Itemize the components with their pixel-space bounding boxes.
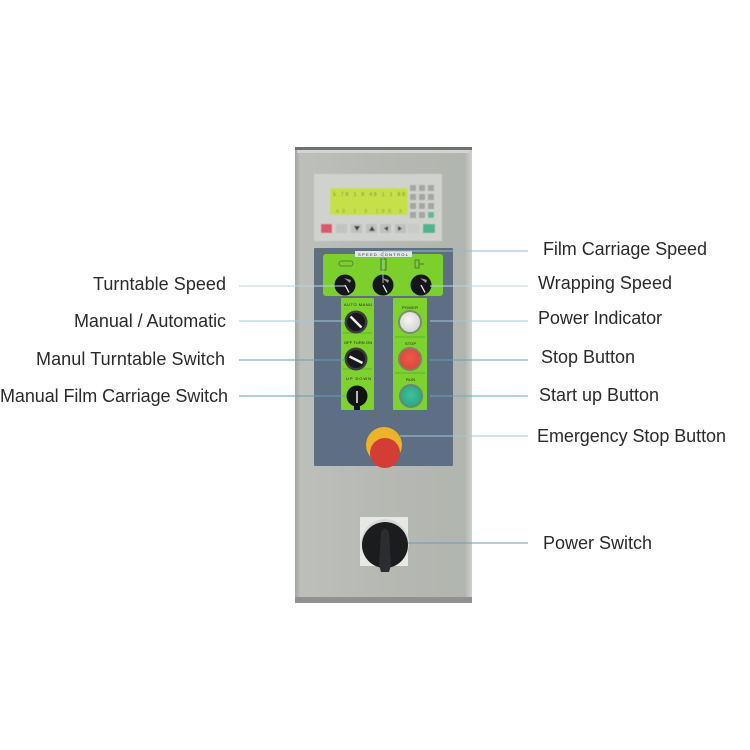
selector switch column: OFF TURN ON: [344, 340, 372, 345]
speed control section: SPEED CONTROL: [358, 252, 409, 257]
push button column: [393, 298, 427, 410]
main power switch: [360, 517, 409, 572]
power indicator lamp: [398, 310, 422, 334]
selector: manual / automatic: [344, 310, 368, 334]
LCD display: 5.78 1 8 48 1 1 88: [333, 192, 405, 198]
push button column: POWER: [402, 305, 418, 310]
speed control section: [323, 251, 443, 296]
function keys: [321, 224, 435, 233]
start button: [399, 384, 423, 408]
control cabinet panel: [295, 147, 472, 603]
label: Stop Button: Stop Button: [541, 347, 635, 367]
stop button: [398, 347, 422, 371]
selector: film carriage: [346, 386, 368, 410]
label: Film Carriage Speed: Film Carriage Speed: [543, 239, 707, 259]
speed knob: film carriage: [372, 274, 394, 296]
LCD display: 48 1 8 188 8: [336, 209, 402, 215]
blue-grey control plate: [314, 248, 453, 468]
speed knob: turntable: [334, 274, 356, 296]
label: Manual / Automatic: Manual / Automatic: [74, 311, 226, 331]
push button column: RUN: [406, 377, 415, 382]
label: Power Indicator: Power Indicator: [538, 308, 662, 328]
label: Turntable Speed: Turntable Speed: [93, 274, 226, 294]
LCD display: [330, 188, 408, 215]
label: Wrapping Speed: Wrapping Speed: [538, 273, 672, 293]
label: Manual Film Carriage Switch: Manual Film Carriage Switch: [0, 386, 228, 406]
HMI controller: [314, 174, 442, 241]
label: Power Switch: Power Switch: [543, 533, 652, 553]
leader lines: [239, 251, 528, 543]
emergency stop button: [366, 427, 402, 468]
selector: turntable: [344, 348, 368, 370]
label: Emergency Stop Button: Emergency Stop Button: [537, 426, 726, 446]
label: Manul Turntable Switch: Manul Turntable Switch: [36, 349, 225, 369]
keypad: [410, 185, 434, 218]
speed knob: wrapping: [410, 274, 432, 296]
push button column: STOP: [405, 341, 416, 346]
label: Start up Button: Start up Button: [539, 385, 659, 405]
selector switch column: [341, 298, 374, 410]
selector switch column: AUTO MANU: [344, 302, 372, 307]
selector switch column: UP DOWN: [346, 376, 371, 381]
